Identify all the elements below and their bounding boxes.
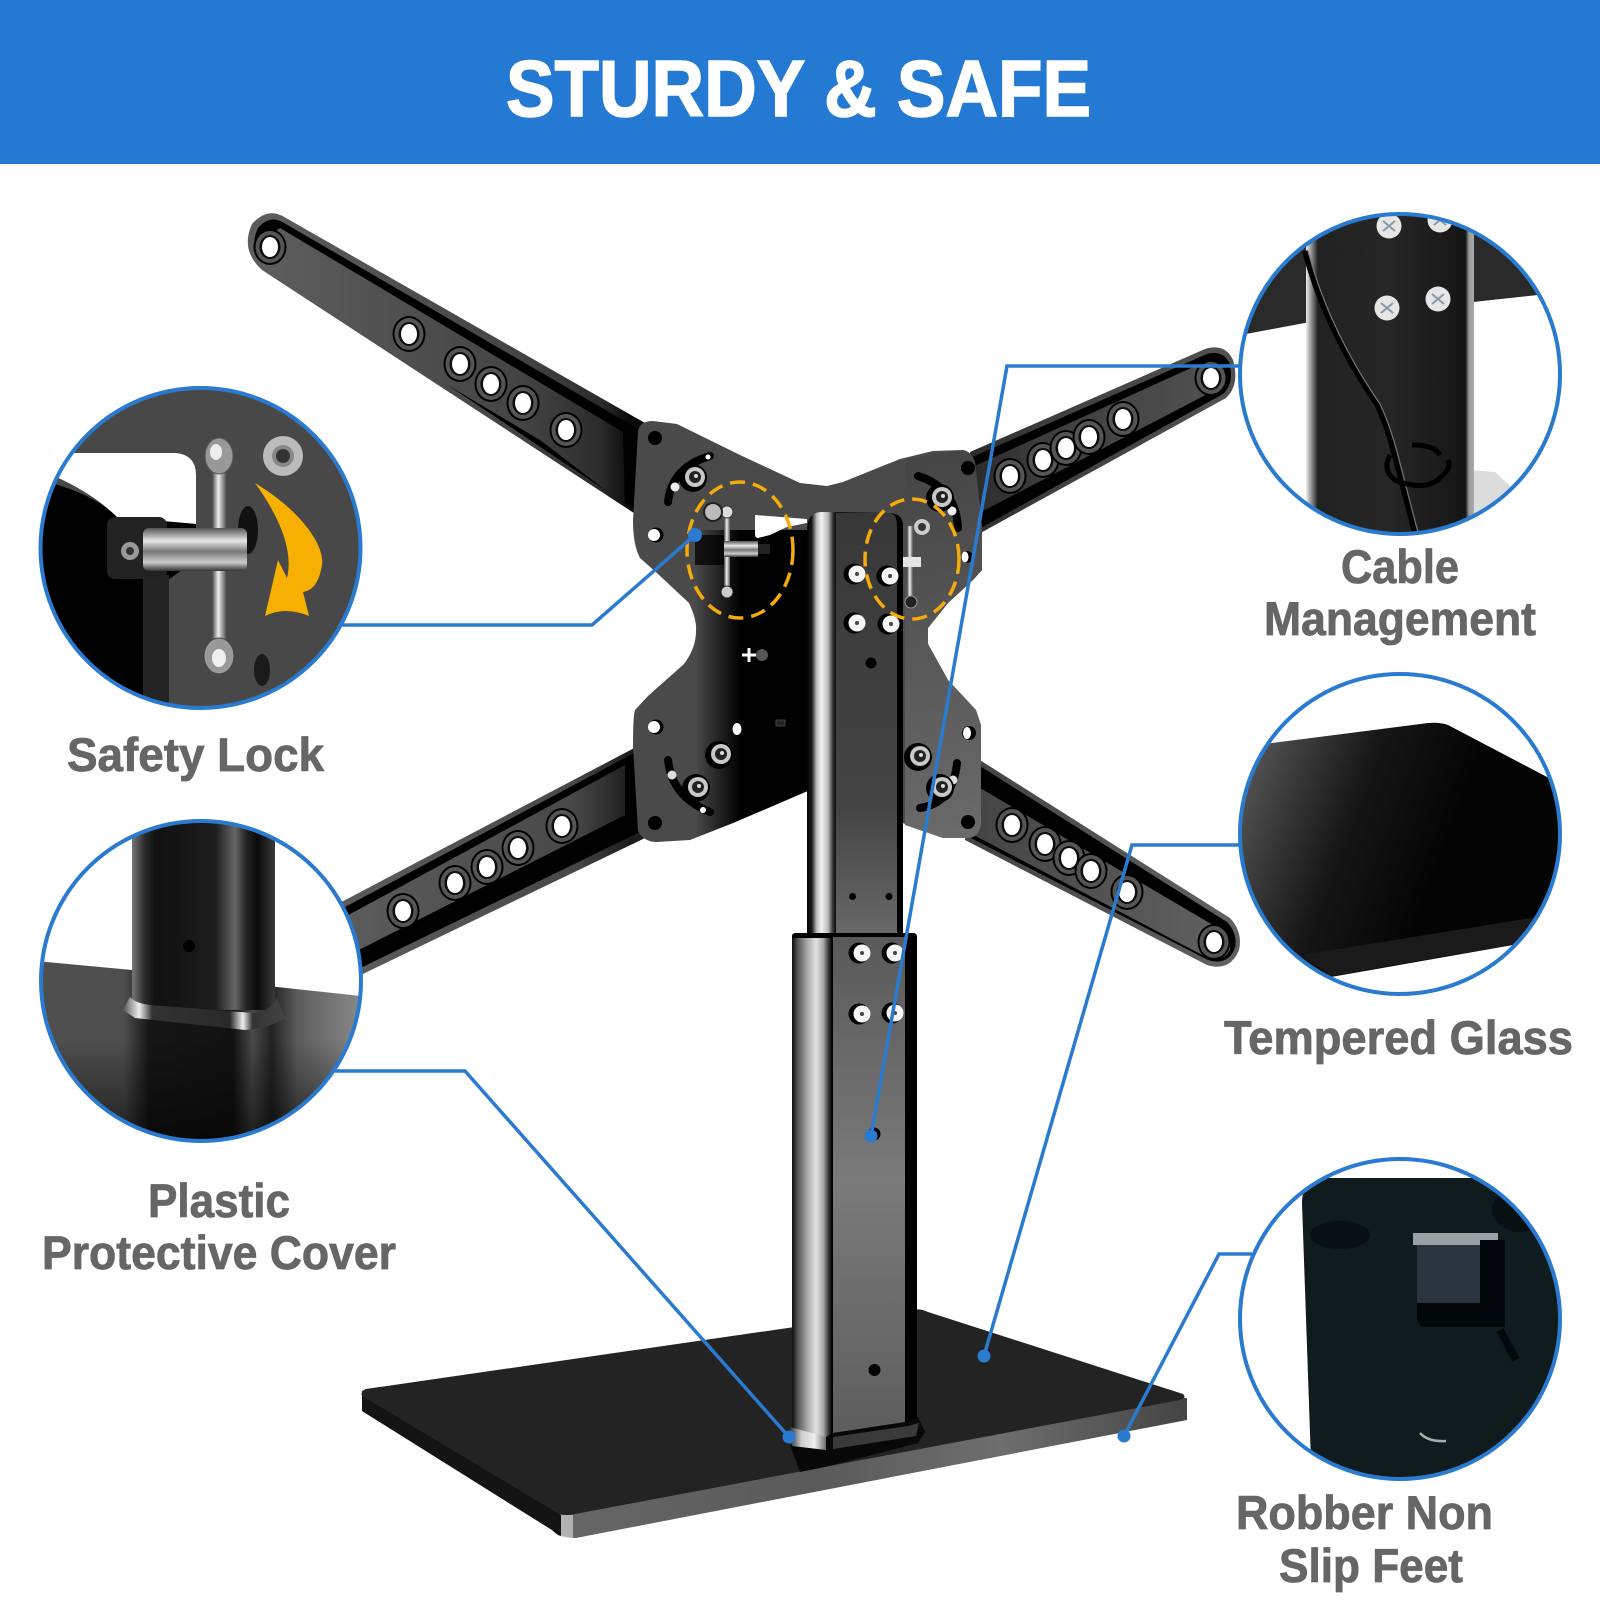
column screws	[844, 564, 900, 668]
phillips screw	[742, 648, 785, 726]
leader line: tempered glass	[978, 845, 1240, 1362]
upper column	[807, 512, 903, 940]
header banner	[0, 0, 1600, 164]
label: cable management: Management	[1264, 592, 1536, 645]
label: robber non slip feet: Slip Feet	[1279, 1539, 1463, 1592]
vesa plate	[633, 421, 982, 842]
callout circle: safety lock	[30, 388, 360, 720]
bracket white notch	[755, 515, 807, 538]
callout circle: tempered glass	[1230, 674, 1570, 994]
label: safety lock: Safety Lock	[67, 728, 325, 781]
callout circle: cable management	[1235, 205, 1565, 540]
dark bracket shading	[690, 530, 810, 840]
leader line: plastic cover	[335, 1071, 796, 1444]
plastic foot cover	[790, 1417, 925, 1472]
leader line: safety lock	[342, 528, 702, 625]
leader line: rubber feet	[1118, 1254, 1252, 1442]
safety lock handle left	[704, 503, 770, 598]
lock shadow	[695, 535, 730, 565]
label: plastic protective cover	[42, 1174, 396, 1279]
label: tempered glass: Tempered Glass	[1224, 1011, 1573, 1064]
mount arm: lower right	[965, 757, 1240, 967]
callout circle: plastic protective cover	[35, 815, 370, 1150]
lower column	[792, 933, 917, 1438]
label: robber non slip feet: Robber Non	[1236, 1486, 1493, 1539]
mount arm: upper right	[970, 347, 1235, 536]
label: plastic protective cover: Plastic	[148, 1174, 290, 1227]
mount arm: lower left	[330, 745, 645, 985]
base plate	[362, 1309, 1187, 1538]
dashed highlight right	[865, 499, 959, 619]
callout circle: robber non slip feet	[1240, 1159, 1570, 1490]
arrow: rotate direction	[255, 483, 322, 616]
leader line: cable management	[864, 366, 1240, 1142]
title: STURDY & SAFE	[506, 44, 1091, 133]
label: plastic protective cover: Protective Cover	[42, 1226, 396, 1279]
safety lock handle right	[903, 519, 930, 608]
dashed highlight left	[687, 482, 793, 618]
label: robber non slip feet	[1236, 1486, 1493, 1592]
label: cable management	[1264, 540, 1536, 645]
mount arm: upper left	[248, 213, 645, 517]
slots and holes	[648, 431, 976, 830]
tv stand product	[248, 213, 1240, 1538]
label: cable management: Cable	[1341, 540, 1459, 593]
